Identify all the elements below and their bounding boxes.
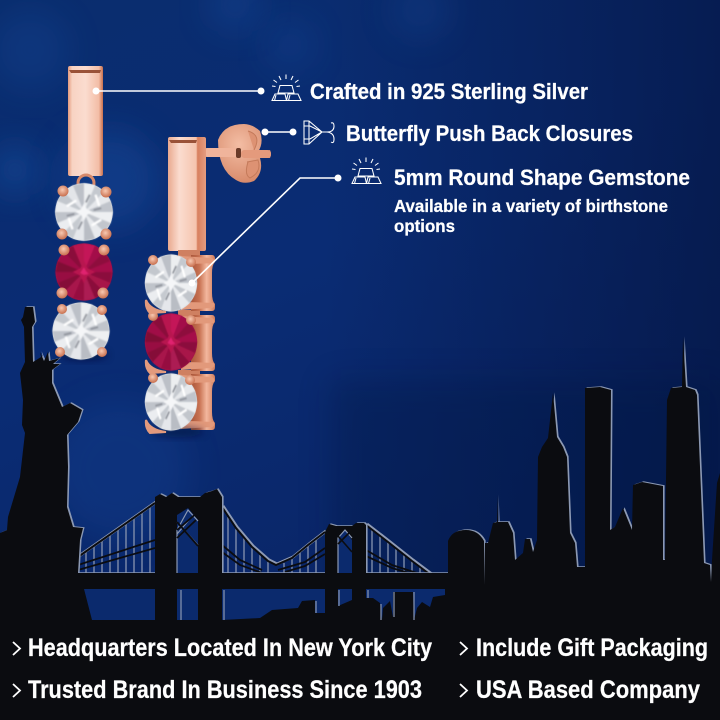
right earring xyxy=(145,124,271,437)
feature list xyxy=(13,634,708,704)
right settings xyxy=(178,250,215,430)
feature: trusted brand: Trusted Brand In Business Since 1903 xyxy=(28,676,422,704)
heading: butterfly closures: Butterfly Push Back Closures xyxy=(346,121,633,146)
right gems xyxy=(145,254,204,437)
skyline silhouette xyxy=(0,306,720,720)
foreground ground band xyxy=(0,620,720,720)
silhouette highlight edge xyxy=(2,306,720,719)
left earring xyxy=(52,66,113,360)
callout line: closures xyxy=(262,128,296,136)
icon: gold bars second xyxy=(352,158,381,184)
below-deck water and buildings xyxy=(84,589,445,620)
city, statue and bridge silhouette xyxy=(0,307,720,720)
heading: gemstone: 5mm Round Shape Gemstone xyxy=(394,165,690,190)
left jump ring xyxy=(78,175,94,191)
butterfly back xyxy=(205,124,271,183)
text block: birthstone options: Available in a variety of birthstone xyxy=(394,196,668,216)
icon: gold bars xyxy=(272,74,301,100)
text block: birthstone options: options xyxy=(394,216,455,236)
left prongs and gems xyxy=(52,183,113,360)
feature: headquarters: Headquarters Located In New York City xyxy=(28,634,432,662)
heading: crafted in sterling silver: Crafted in 925 Sterling Silver xyxy=(310,79,588,104)
callout line: gemstone xyxy=(188,174,342,286)
right bar xyxy=(168,137,206,251)
callout line: sterling silver xyxy=(92,88,264,94)
icon: diamond and butterfly back xyxy=(304,121,334,144)
right prongs xyxy=(146,255,196,433)
bridge tower openings xyxy=(177,508,352,573)
bridge suspenders and cables xyxy=(78,502,433,576)
left bar xyxy=(68,66,103,176)
text block: birthstone options xyxy=(394,196,668,236)
